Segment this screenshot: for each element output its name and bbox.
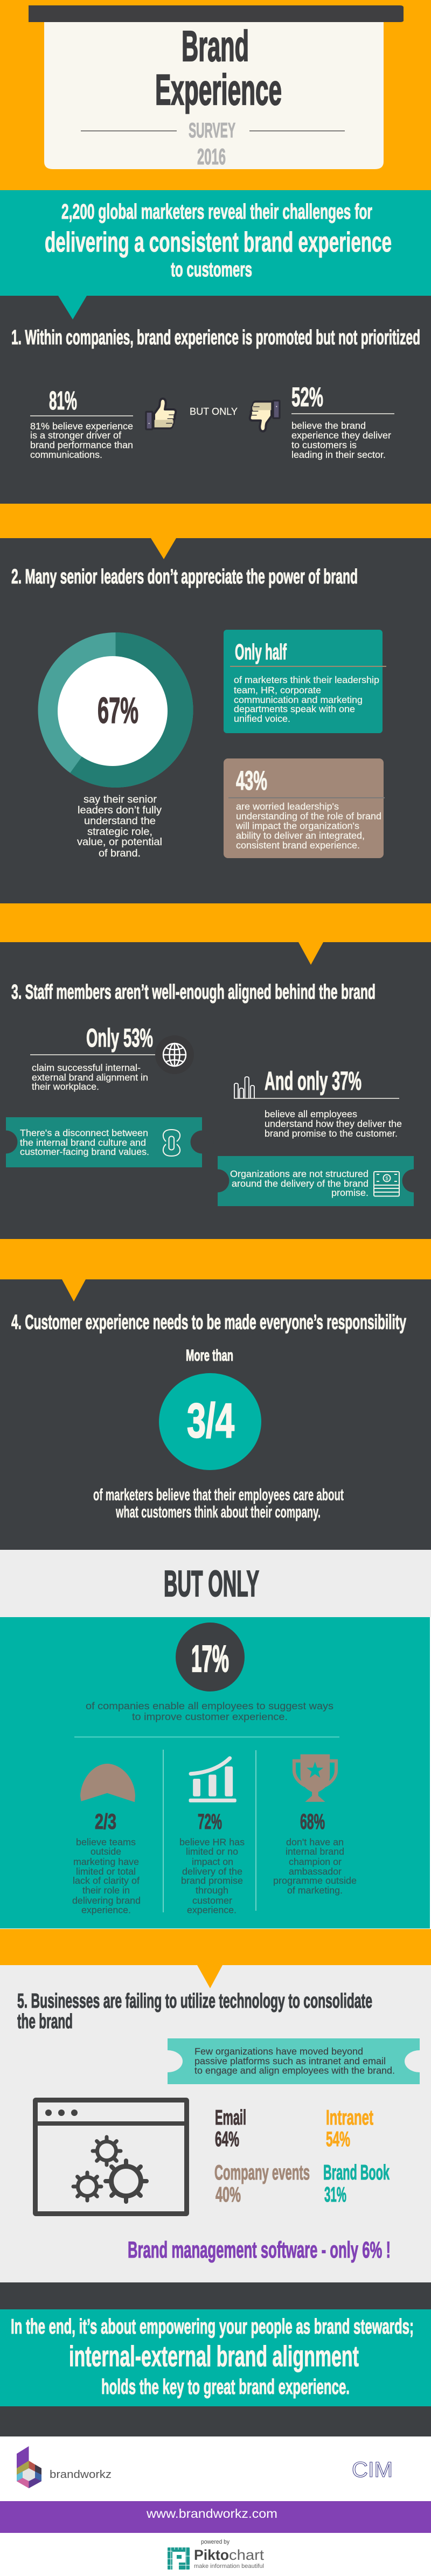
icon: growth chart (189, 1758, 237, 1802)
stat: and only 37%: brand promise to the customer. (265, 1128, 398, 1139)
callout: disconnect ticket: There's a disconnect between (20, 1127, 148, 1138)
subheading: year: 2016 (197, 144, 226, 169)
icon: piktochart mark (168, 2547, 190, 2570)
column: 72%: limited or no (186, 1846, 238, 1857)
heading: Brand: Brand (182, 22, 249, 70)
callout: 43%: will impact the organization's (235, 820, 359, 831)
stat: only 53%: Only 53% (86, 1024, 153, 1053)
logo: brandworkz: brandworkz (50, 2469, 112, 2481)
callout: disconnect ticket: the internal brand culture and (20, 1137, 146, 1148)
panel: website banner: www.brandworkz.com (146, 2507, 277, 2521)
stat: only 53% (30, 1024, 165, 1092)
text: donut caption: say their senior (84, 794, 157, 805)
text: donut caption: understand the (84, 816, 156, 827)
icon: thumbs down (250, 401, 280, 431)
stat: and only 37%: And only 37% (265, 1067, 362, 1096)
column: 2/3: lack of clarity of (73, 1875, 140, 1886)
logo: CIM: CIM (352, 2458, 393, 2482)
logo: brandworkz (17, 2446, 112, 2488)
stat: 52%: to customers is (291, 440, 357, 450)
column: 72%: through (196, 1885, 228, 1896)
panel: website banner (0, 2501, 431, 2533)
stat: and only 37% (234, 1067, 402, 1139)
band: orange divider 2 (0, 903, 431, 942)
stat: only 53%: their workplace. (32, 1081, 99, 1092)
stat: only 53%: external brand alignment in (32, 1072, 148, 1083)
stat: 81%: 81% believe experience (30, 421, 133, 431)
panel: 17% stats (0, 1617, 430, 1928)
panel: intro banner: to customers (171, 259, 252, 281)
stat: email (215, 2106, 246, 2151)
column: 2/3: believe teams (76, 1837, 136, 1848)
stat: 81%: communications. (30, 449, 102, 460)
callout: only half: Only half (235, 639, 287, 664)
icon: thumbs up (146, 399, 176, 429)
column: 72%: brand promise (181, 1875, 243, 1886)
stat: 3/4 circle: 3/4 (187, 1394, 234, 1448)
stat: 52% (291, 382, 394, 460)
panel: section 3 (0, 942, 431, 1239)
chart: 67% donut: 67% (98, 690, 138, 731)
icon: dome (80, 1764, 135, 1802)
icon: chain link (163, 1130, 180, 1156)
text: donut caption: value, or potential (77, 837, 162, 848)
callout: 43%: consistent brand experience. (236, 840, 360, 851)
callout: organizations ticket: around the delivery of the brand (232, 1178, 369, 1189)
column: 2/3: limited or total (76, 1866, 136, 1877)
stat: 52%: experience they deliver (291, 430, 391, 441)
stat: 52%: leading in their sector. (291, 449, 386, 460)
panel: title header (0, 0, 431, 190)
column: 2/3: marketing have (73, 1856, 139, 1867)
icon: bar chart (234, 1077, 254, 1098)
text: donut caption: leaders don’t fully (78, 805, 162, 816)
panel: section 5 (0, 1965, 431, 2282)
panel: section 1 (0, 296, 431, 504)
callout: organizations ticket (206, 1156, 426, 1206)
label: but only: BUT ONLY (190, 406, 238, 417)
stat: 3/4 circle (159, 1373, 261, 1470)
callout: passive platforms ticket (152, 2038, 431, 2084)
logo: powered by piktochart: chart (229, 2547, 265, 2563)
logo: powered by piktochart: Pikto (194, 2547, 229, 2563)
stat: intranet: Intranet (326, 2106, 373, 2129)
column: 2/3: outside (91, 1846, 121, 1857)
logo: powered by piktochart: powered by (201, 2539, 230, 2545)
stat: email: 64% (215, 2128, 239, 2151)
column: 68%: don't have an (286, 1837, 344, 1848)
icon: browser window with gears (33, 2100, 189, 2214)
icon: banknotes: $ (385, 1175, 388, 1181)
heading: Experience: Experience (155, 66, 282, 114)
stat: company events: Company events (214, 2161, 310, 2184)
column: 68%: of marketing. (287, 1885, 343, 1896)
column: 72%: impact on (192, 1856, 233, 1867)
text: 17% caption (86, 1700, 333, 1722)
stat: 81% (30, 387, 133, 460)
column: 68%: champion or (289, 1856, 342, 1867)
logo: powered by piktochart (168, 2539, 265, 2570)
stat: intranet (326, 2106, 373, 2151)
band: orange divider 1 (0, 504, 431, 538)
stat: 52%: 52% (291, 382, 323, 412)
column: 2/3: experience. (81, 1905, 131, 1916)
column: 68%: internal brand (286, 1846, 344, 1857)
callout: 43%: understanding of the role of brand (236, 811, 381, 821)
panel: but only banner: BUT ONLY (164, 1563, 259, 1604)
text: 3/4 caption (93, 1485, 344, 1521)
stat: 81%: 81% (49, 387, 77, 415)
stat: intranet: 54% (326, 2128, 350, 2151)
callout: only half (224, 630, 386, 733)
stat: 17% circle: 17% (191, 1638, 229, 1680)
band: orange divider 3 (0, 1239, 431, 1279)
column: 72%: believe HR has (179, 1837, 245, 1848)
column: 68%: ambassador (289, 1866, 342, 1877)
band: orange divider 4 (0, 1929, 431, 1965)
panel: conclusion (0, 2282, 431, 2436)
stat: 81%: brand performance than (30, 440, 133, 450)
column: 68%: programme outside (273, 1875, 357, 1886)
text: donut caption (77, 794, 162, 859)
text: donut caption: strategic role, (87, 826, 152, 838)
icon: banknotes (374, 1172, 399, 1196)
column: 2/3: their role in (82, 1885, 130, 1896)
column: 72%: 72% (198, 1810, 222, 1834)
stat: 81%: is a stronger driver of (30, 430, 121, 441)
stat: company events (214, 2161, 310, 2206)
chart: 67% donut (38, 632, 193, 788)
callout: only half: team, HR, corporate (234, 685, 321, 695)
stat: 17% circle (176, 1623, 245, 1691)
logo: powered by piktochart: make information beautiful (194, 2563, 264, 2570)
text: donut caption: of brand. (99, 848, 141, 859)
callout: 43% (224, 758, 385, 858)
stat: 52%: believe the brand (291, 420, 366, 431)
label: more than: More than (186, 1347, 233, 1364)
callout: disconnect ticket (0, 1117, 213, 1167)
column: 72% (179, 1758, 245, 1916)
callout: 43%: 43% (236, 765, 267, 796)
callout: only half: communication and marketing (234, 694, 363, 705)
heading: section 5: the brand (17, 2010, 73, 2033)
panel: section 2 (0, 538, 431, 903)
column: 72%: delivery of the (182, 1866, 242, 1877)
column: 72%: customer (192, 1895, 232, 1906)
text: 17% caption: of companies enable all employees to suggest ways (86, 1700, 333, 1711)
stat: email: Email (215, 2106, 246, 2129)
stat: brand book: 31% (324, 2183, 346, 2206)
text: 17% caption: to improve customer experience. (132, 1711, 288, 1722)
panel: section 4 (0, 1279, 431, 1550)
column: 2/3: delivering brand (72, 1895, 141, 1906)
stat: company events: 40% (215, 2183, 241, 2206)
callout: organizations ticket: Organizations are not structured (230, 1168, 369, 1179)
callout: only half: departments speak with one (234, 704, 355, 714)
icon: globe (155, 1035, 194, 1074)
stat: only 53%: claim successful internal- (32, 1062, 141, 1073)
callout: only half: of marketers think their leadership (234, 674, 379, 685)
column: 68%: 68% (300, 1810, 325, 1834)
callout: passive platforms ticket: to engage and align employees with the brand. (194, 2065, 395, 2076)
subheading: survey: SURVEY (189, 119, 235, 142)
callout: disconnect ticket: customer-facing brand values. (20, 1146, 149, 1157)
stat: and only 37%: believe all employees (265, 1109, 357, 1119)
column: 2/3: 2/3 (95, 1810, 116, 1834)
callout: only half: unified voice. (234, 713, 290, 724)
column: 72%: experience. (187, 1905, 237, 1916)
stat: and only 37%: understand how they deliver the (265, 1118, 402, 1129)
callout: organizations ticket: promise. (331, 1187, 369, 1198)
panel: but only banner (0, 1550, 431, 1617)
heading: section 5 (17, 1990, 372, 2033)
column: 2/3 (72, 1764, 141, 1916)
callout: passive platforms ticket: passive platforms such as intranet and email (194, 2056, 386, 2066)
panel: intro banner (0, 190, 431, 296)
callout: passive platforms ticket: Few organizations have moved beyond (194, 2046, 363, 2057)
column: 68% (273, 1755, 357, 1896)
callout: 43%: are worried leadership's (236, 801, 339, 812)
stat: brand book (323, 2161, 390, 2206)
icon: trophy (294, 1755, 336, 1802)
callout: 43%: ability to deliver an integrated, (236, 830, 365, 841)
